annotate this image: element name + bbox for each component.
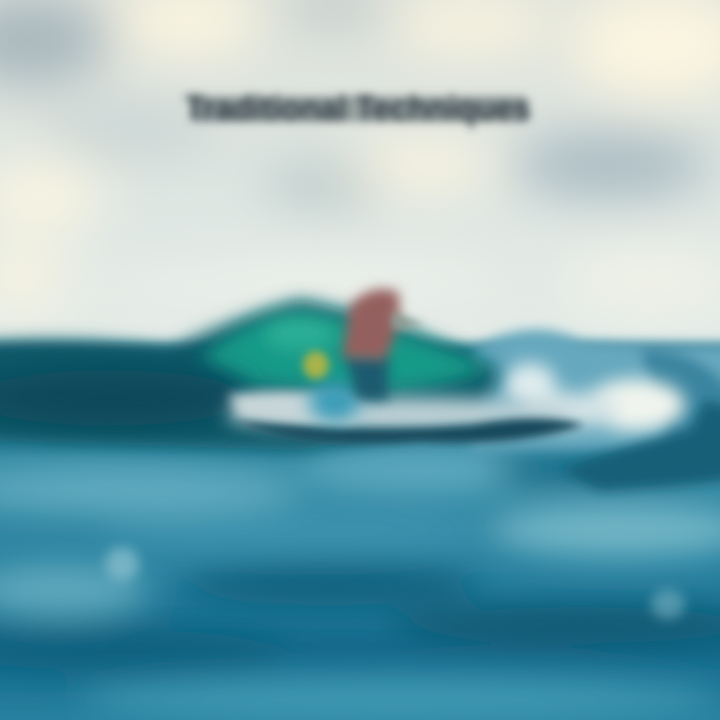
foam highlight: right droplet [651, 589, 685, 619]
panel: cloudy sky background [0, 0, 720, 360]
figure: surfer [303, 289, 425, 400]
heading: blurred title: Traditional Techniques [185, 89, 531, 128]
surfboard [225, 382, 585, 444]
wave: green crest [200, 310, 490, 392]
panel: ocean water [0, 345, 720, 720]
wave: dark shadow beneath the crest [0, 370, 250, 426]
surfer torso [342, 289, 399, 360]
wave: white foam on the right [504, 363, 685, 431]
wave: dark teal left wall [0, 300, 500, 450]
surfer legs [345, 355, 388, 400]
surfer arm [392, 312, 425, 330]
wave: distant right swell [470, 330, 720, 450]
foam highlight: left droplet [105, 547, 139, 581]
wave: right edge dark water [560, 400, 720, 490]
yellow accessory [303, 351, 329, 379]
